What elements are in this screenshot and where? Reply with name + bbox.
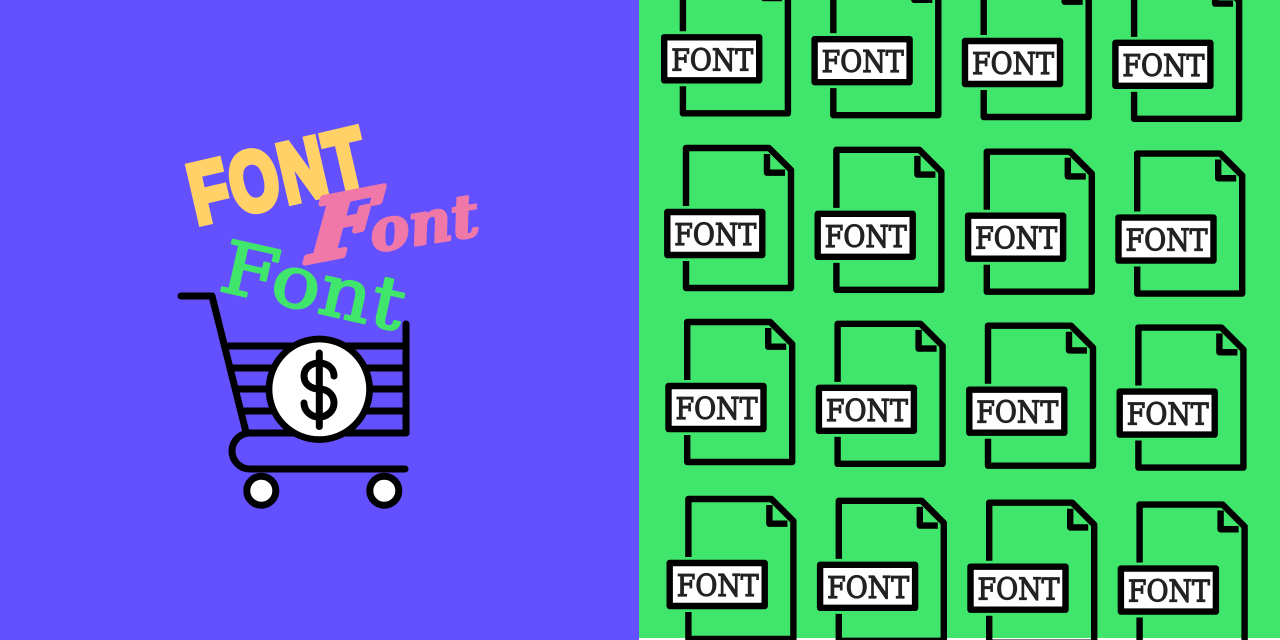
icon: font file row 1 col 4 (1115, 0, 1239, 119)
icon: font file row 3 col 1: FONT (675, 392, 757, 427)
icon: font file row 2 col 3 (968, 152, 1092, 292)
heading: pink script Font (303, 170, 483, 283)
icon grid: font files (664, 0, 1245, 640)
panel: green background (639, 0, 1280, 638)
heading: green typewriter Font: Font (213, 226, 413, 348)
dollar sign (304, 353, 334, 426)
icon: font file row 3 col 3: FONT (976, 396, 1058, 431)
icon: font file row 4 col 3 (970, 503, 1094, 640)
icon: font file row 4 col 2 (820, 501, 944, 640)
icon: font file row 1 col 2: FONT (822, 45, 904, 80)
icon: font file row 2 col 3: FONT (975, 222, 1057, 257)
icon: font file row 2 col 1: FONT (674, 218, 756, 253)
icon: shopping cart with dollar coin (181, 296, 406, 505)
cart left wheel (247, 476, 276, 505)
icon: font file row 4 col 4: FONT (1128, 575, 1210, 610)
band: white bottom strip (639, 638, 1280, 640)
heading: yellow FONT: FONT (180, 109, 377, 242)
panel: purple background (0, 0, 639, 640)
icon: font file row 2 col 2: FONT (825, 220, 907, 255)
icon: font file row 3 col 3 (969, 326, 1093, 466)
icon: font file row 1 col 4: FONT (1122, 49, 1204, 84)
icon: font file row 4 col 1: FONT (677, 569, 759, 604)
cart right post and lower rail (232, 324, 406, 469)
cart right wheel (370, 476, 399, 505)
pink ont: ont (364, 181, 483, 266)
icon: font file row 1 col 2 (815, 0, 938, 115)
icon: font file row 4 col 4 (1121, 505, 1245, 640)
icon: font file row 2 col 4 (1118, 154, 1242, 294)
icon: font file row 2 col 2 (818, 150, 941, 290)
pink capital F: F (303, 170, 385, 283)
icon: font file row 1 col 3: FONT (972, 47, 1054, 82)
icon: font file row 2 col 4: FONT (1126, 224, 1208, 259)
icon: font file row 1 col 1: FONT (671, 43, 753, 78)
icon: font file row 3 col 2: FONT (826, 394, 908, 429)
icon: font file row 2 col 1 (667, 148, 791, 288)
icon: font file row 3 col 4 (1120, 328, 1243, 468)
icon: font file row 1 col 3 (965, 0, 1089, 117)
dollar coin (269, 339, 370, 440)
icon: font file row 4 col 3: FONT (978, 573, 1060, 608)
cart basket bars (226, 346, 406, 411)
icon: font file row 3 col 1 (668, 322, 792, 462)
icon: font file row 4 col 1 (670, 499, 793, 639)
icon: font file row 1 col 1 (664, 0, 788, 113)
icon: font file row 4 col 2: FONT (827, 571, 909, 606)
icon: font file row 3 col 4: FONT (1127, 398, 1209, 433)
icon: font file row 3 col 2 (819, 324, 943, 464)
cart handle and frame (181, 296, 246, 432)
